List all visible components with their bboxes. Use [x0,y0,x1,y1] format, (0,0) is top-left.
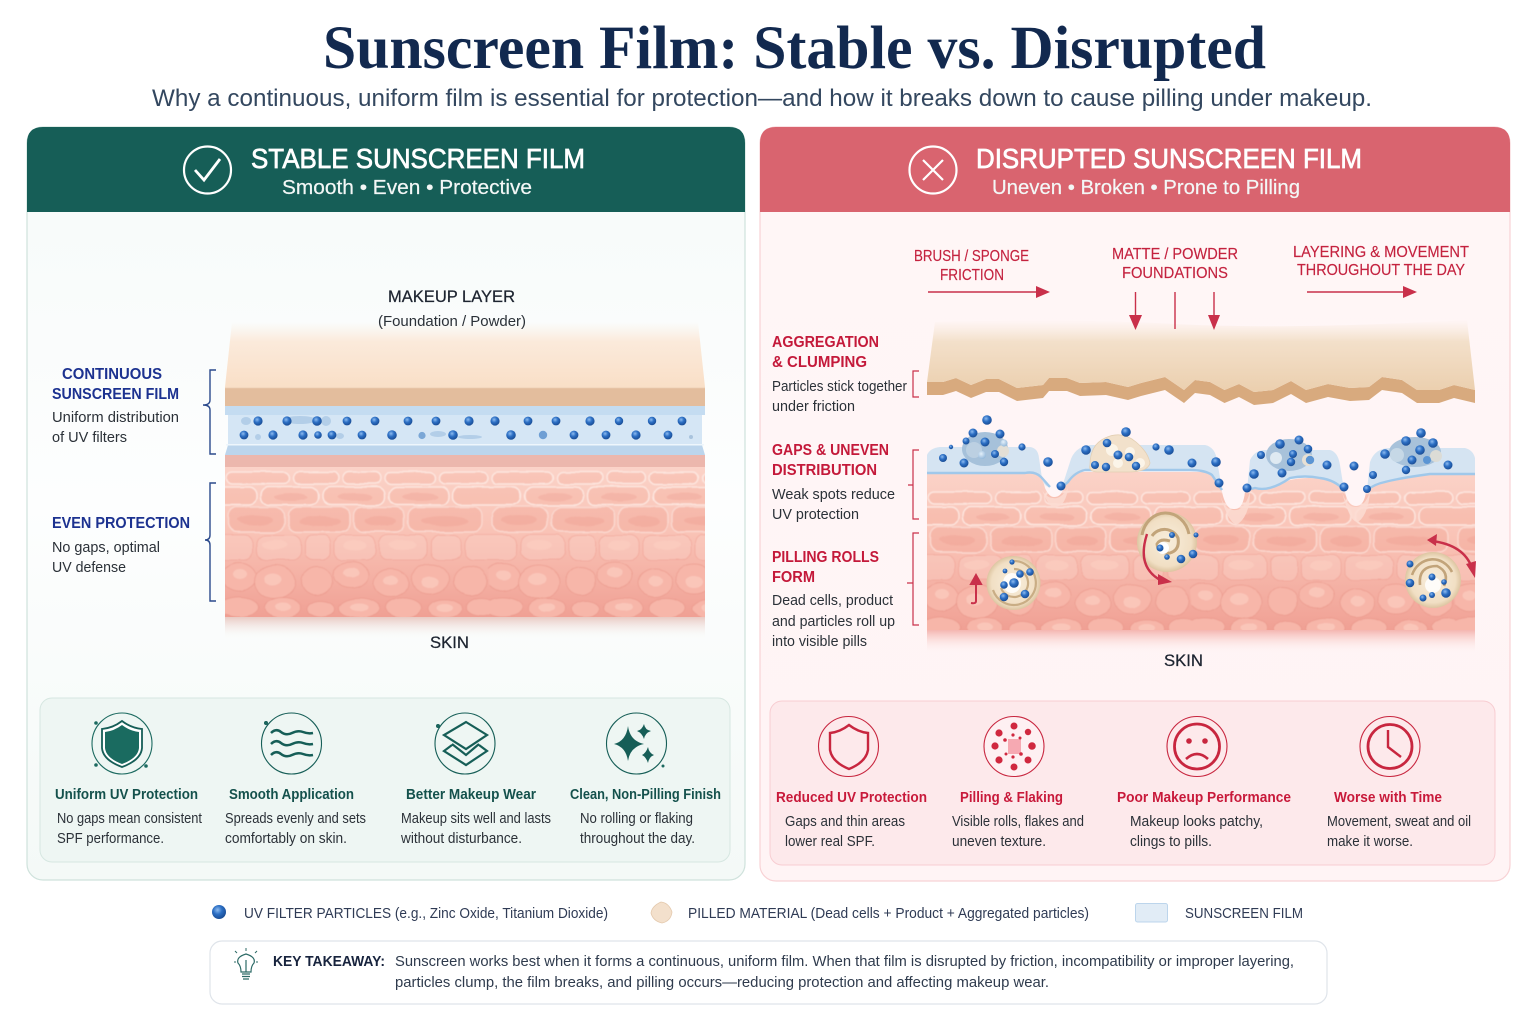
callout: pilling rolls form [772,533,919,650]
cause: brush sponge friction [914,248,1050,298]
consequences panel [770,701,1495,865]
arrow: pill 2 rotation [1144,534,1172,585]
broken sunscreen film [927,445,1475,490]
damaged skin layer [917,469,1487,654]
consequence: worse with time: make it worse. [1327,834,1413,850]
icon: sparkles [606,713,666,774]
icon: cross circle [910,146,956,194]
consequence: reduced UV protection: Gaps and thin areas [785,814,905,830]
cause: layering and movement [1293,244,1469,298]
benefit: better makeup wear: Makeup sits well and lasts [401,811,551,827]
callout: even protection [52,483,216,601]
legend: sunscreen film: SUNSCREEN FILM [1185,906,1303,922]
arrow: pill 3 rotation [1427,534,1476,578]
cause: brush sponge friction: FRICTION [940,267,1004,284]
panel: stable sunscreen film [27,127,745,880]
disrupted tagline: Uneven • Broken • Prone to Pilling [992,177,1300,199]
benefits panel [40,698,730,862]
callout: continuous sunscreen film: CONTINUOUS [62,366,162,383]
benefit: clean non-pilling finish: throughout the day. [580,831,695,847]
makeup layer label [378,287,526,330]
takeaway label: KEY TAKEAWAY: [273,954,385,970]
cause: brush sponge friction: BRUSH / SPONGE [914,248,1029,265]
benefit: smooth application: Spreads evenly and sets [225,811,366,827]
consequence: poor makeup performance [1117,716,1291,850]
callout: continuous sunscreen film: SUNSCREEN FILM [52,386,179,403]
legend: pilled material: PILLED MATERIAL (Dead cells + Product + Aggregated particles) [688,906,1089,922]
callout: pilling rolls form: PILLING ROLLS [772,549,879,566]
consequence: worse with time [1327,716,1471,850]
consequence: worse with time: Movement, sweat and oil [1327,814,1471,830]
icon: thin shield [818,716,878,776]
benefit: smooth application [225,713,366,847]
icon: shield [92,713,152,774]
callout: continuous sunscreen film [52,366,216,454]
cause: layering and movement: THROUGHOUT THE DAY [1297,262,1465,279]
diagram: stable layers [215,322,715,639]
pill roll 3 [1405,552,1461,608]
clumped particles 2 [1081,427,1224,488]
consequence: worse with time: Worse with Time [1334,790,1442,806]
cause: matte powder foundations: FOUNDATIONS [1122,265,1228,282]
benefit: uniform UV protection: SPF performance. [57,831,164,847]
callout: gaps and uneven distribution: DISTRIBUTION [772,462,877,479]
callout: gaps and uneven distribution: UV protection [772,507,859,523]
legend: UV filter particles: UV FILTER PARTICLES (e.g., Zinc Oxide, Titanium Dioxide) [244,906,608,922]
consequence: pilling and flaking: uneven texture. [952,834,1046,850]
icon: layers [435,713,495,774]
callout: pilling rolls form: Dead cells, product [772,593,893,609]
skin label: SKIN [1164,651,1203,670]
consequence: pilling and flaking [952,716,1084,850]
callout: pilling rolls form: FORM [772,569,815,586]
takeaway text [395,954,1294,991]
consequence: poor makeup performance: Poor Makeup Performance [1117,790,1291,806]
benefit: smooth application: comfortably on skin. [225,831,347,847]
benefit: uniform UV protection: No gaps mean consistent [57,811,202,827]
icon: scattered flakes [984,716,1044,776]
benefit: clean non-pilling finish: No rolling or flaking [580,811,693,827]
consequence: poor makeup performance: clings to pills. [1130,834,1212,850]
callout: pilling rolls form: into visible pills [772,634,867,650]
icon: light bulb [234,948,258,979]
callout: aggregation and clumping: Particles stick together [772,379,907,395]
consequence: poor makeup performance: Makeup looks patchy, [1130,814,1263,830]
icon: waves [262,713,322,774]
consequence: reduced UV protection [776,716,927,850]
stable tagline: Smooth • Even • Protective [282,177,532,199]
skin label: SKIN [430,633,469,652]
disrupted heading: DISRUPTED SUNSCREEN FILM [976,143,1362,174]
callout: aggregation and clumping: & CLUMPING [772,354,867,371]
callout: gaps and uneven distribution: Weak spots reduce [772,487,895,503]
callout: even protection: UV defense [52,560,126,576]
clumped particles 1 [939,415,1066,490]
subtitle: Why a continuous, uniform film is essential for protection—and how it breaks down to cause pilling under makeup. [152,85,1372,112]
consequence: pilling and flaking: Pilling & Flaking [960,790,1063,806]
UV filter particles [240,416,693,440]
cause: matte powder foundations [1112,246,1238,330]
icon: sad face [1167,716,1227,776]
callout: continuous sunscreen film: of UV filters [52,430,127,446]
arrow: pill 1 rotation [971,575,981,603]
stable heading: STABLE SUNSCREEN FILM [251,143,585,174]
callout: gaps and uneven distribution: GAPS & UNEVEN [772,442,889,459]
pill roll 1 [986,556,1040,610]
takeaway text: Sunscreen works best when it forms a continuous, uniform film. When that film is disrupted by friction, incompatibility or improper layering, [395,954,1294,970]
callout: pilling rolls form: and particles roll up [772,614,895,630]
takeaway text: particles clump, the film breaks, and pilling occurs—reducing protection and affecting makeup wear. [395,975,1049,991]
title: Sunscreen Film: Stable vs. Disrupted [323,15,1266,82]
consequence: reduced UV protection: Reduced UV Protection [776,790,927,806]
diagram: disrupted layers [917,320,1487,654]
disrupted panel header [760,127,1510,212]
icon: check circle [184,146,231,194]
benefit: smooth application: Smooth Application [229,787,354,803]
callout: continuous sunscreen film: Uniform distribution [52,410,179,426]
callout: aggregation and clumping: AGGREGATION [772,334,879,351]
benefit: clean non-pilling finish [570,713,721,847]
callout: gaps and uneven distribution [772,442,919,523]
callout: even protection: No gaps, optimal [52,540,160,556]
benefit: better makeup wear [400,713,551,847]
callout: even protection: EVEN PROTECTION [52,515,190,532]
legend: pilled material [651,902,1089,923]
makeup layer label: MAKEUP LAYER [388,287,515,306]
icon: clock [1360,716,1420,776]
cause: layering and movement: LAYERING & MOVEMENT [1293,244,1469,261]
legend [212,902,1303,923]
benefit: better makeup wear: Better Makeup Wear [406,787,536,803]
benefit: better makeup wear: without disturbance. [400,831,522,847]
benefit: clean non-pilling finish: Clean, Non-Pilling Finish [570,787,721,803]
cause: matte powder foundations: MATTE / POWDER [1112,246,1238,263]
clumped particles 3 [1242,436,1377,493]
key takeaway box [210,941,1327,1004]
callout: aggregation and clumping: under friction [772,399,855,415]
stable panel header [27,127,745,212]
panel: disrupted sunscreen film [760,127,1510,881]
sunscreen film [225,406,705,455]
callout: aggregation and clumping [772,334,919,415]
skin layer [215,455,715,639]
makeup layer [225,322,705,406]
benefit: uniform UV protection: Uniform UV Protection [55,787,198,803]
makeup layer label: (Foundation / Powder) [378,314,526,330]
legend: sunscreen film [1136,904,1303,922]
clumped particles 4 [1380,428,1452,474]
consequence: pilling and flaking: Visible rolls, flakes and [952,814,1084,830]
cracked makeup layer [927,320,1475,405]
pill roll 2 [1137,512,1198,572]
benefit: uniform UV protection [55,713,202,847]
consequence: reduced UV protection: lower real SPF. [785,834,875,850]
